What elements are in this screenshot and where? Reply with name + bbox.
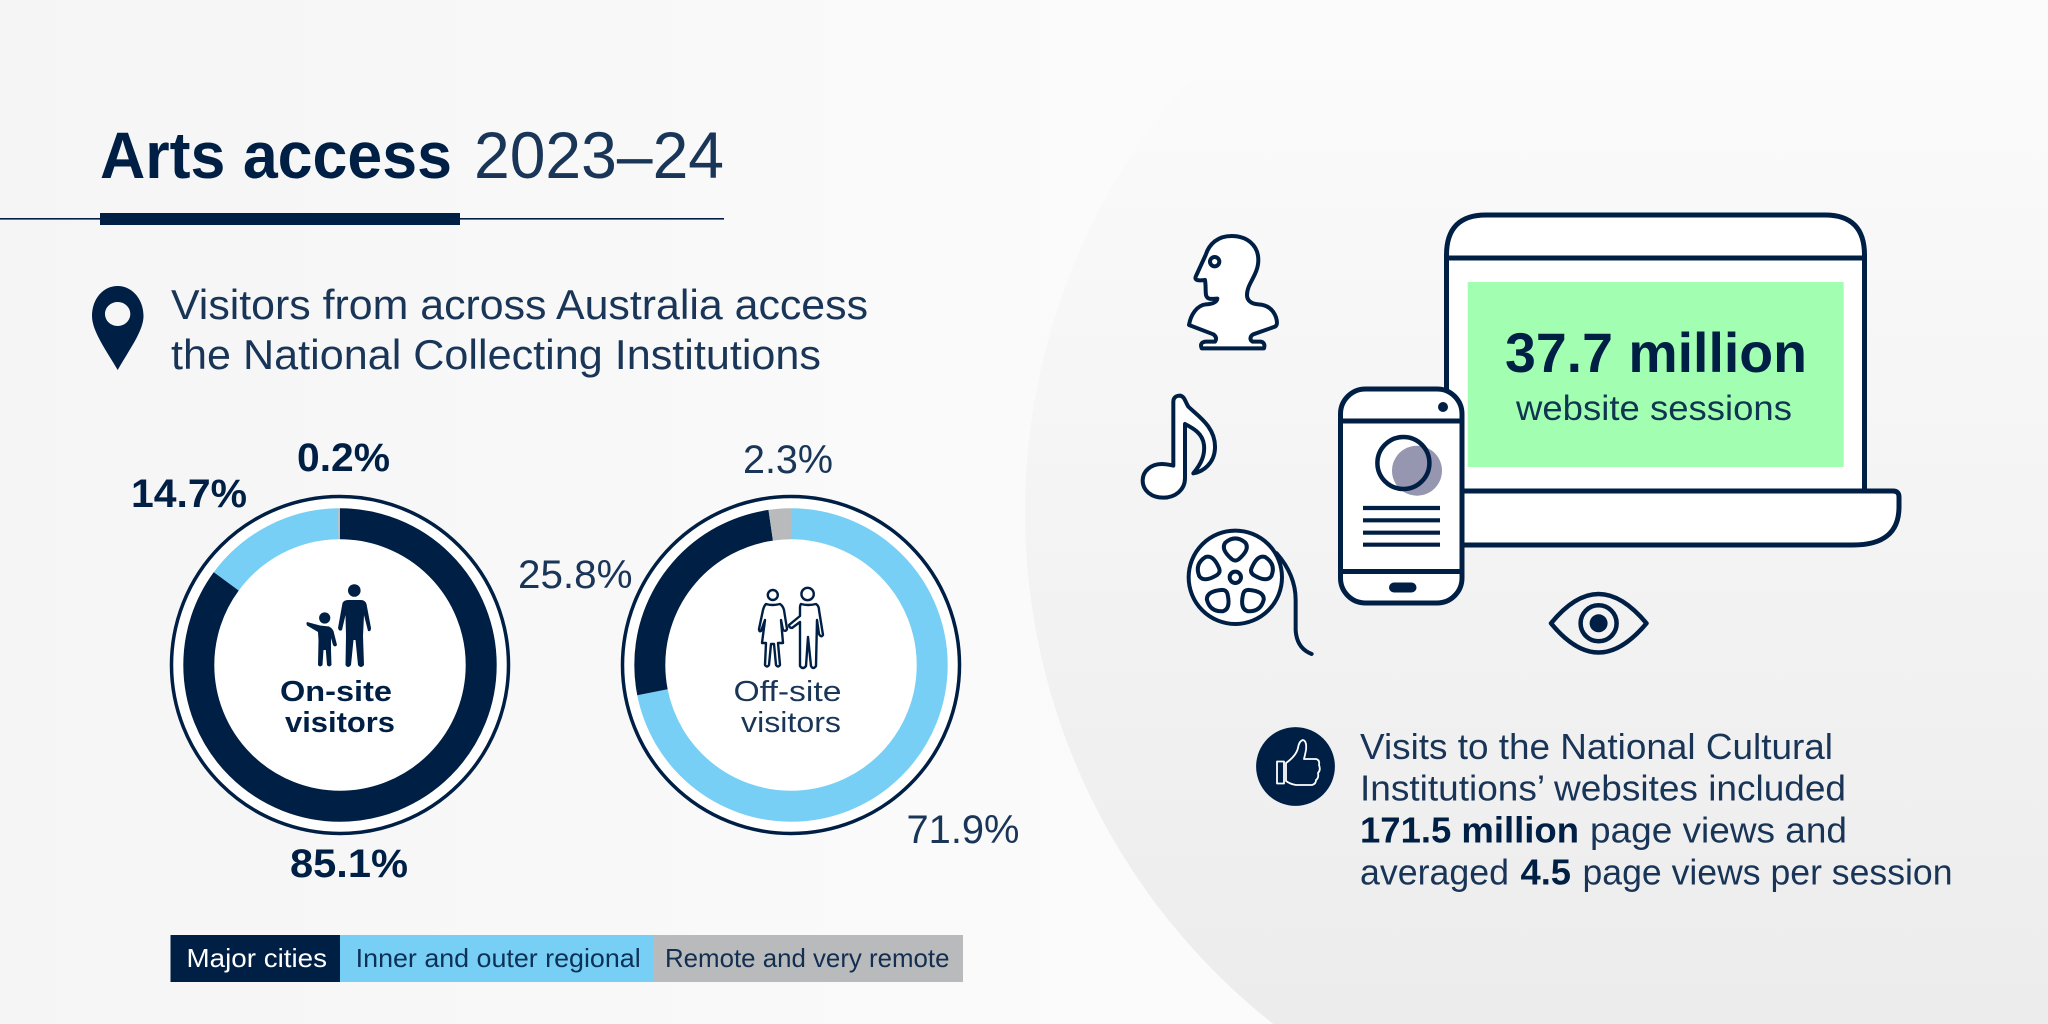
legend: Inner and outer regional (356, 943, 641, 973)
icon: bust sculpture (1189, 236, 1277, 348)
text: page views summary: page views and (1590, 810, 1847, 850)
text: visitors intro: Visitors from across Australia access (171, 281, 868, 328)
icon: eye (1551, 594, 1646, 652)
label: on-site visitors: visitors (285, 707, 395, 739)
label: off-site visitors (734, 676, 842, 739)
text: page views summary: Visits to the National Cultural (1360, 726, 1833, 767)
value: 2.3%: 2.3% (743, 438, 833, 482)
icon: adult and child (306, 584, 371, 667)
panel: website sessions: website sessions (1515, 389, 1792, 428)
icon: phone (1339, 389, 1463, 603)
label: on-site visitors: On-site (280, 676, 392, 708)
panel: website sessions: 37.7 million (1505, 321, 1807, 384)
text: page views summary: 171.5 million (1360, 810, 1579, 850)
value: 71.9%: 71.9% (906, 808, 1020, 852)
text: visitors intro: the National Collecting Institutions (171, 331, 821, 378)
label: off-site visitors: Off-site (734, 676, 842, 708)
legend (170, 935, 963, 982)
text: page views summary: 4.5 (1520, 852, 1571, 892)
label: off-site visitors: visitors (741, 707, 841, 739)
icon: music note (1143, 396, 1215, 498)
legend: Remote and very remote (665, 943, 950, 973)
label: on-site visitors (280, 676, 395, 739)
icon: film reel (1189, 531, 1312, 654)
icon: two outlined people (759, 588, 823, 668)
title: Arts access (100, 118, 452, 192)
title (100, 118, 724, 192)
value: 85.1%: 85.1% (290, 842, 408, 886)
icon: location pin (92, 286, 144, 370)
value: 0.2%: 0.2% (297, 436, 390, 480)
panel: website sessions (1468, 282, 1844, 467)
legend: Major cities (186, 943, 327, 973)
title: 2023–24 (474, 118, 724, 192)
text: page views summary: page views per session (1582, 852, 1952, 892)
icon: laptop (1440, 215, 1899, 545)
text: visitors intro (171, 281, 868, 378)
icon: thumbs up (1256, 727, 1335, 806)
value: 14.7%: 14.7% (131, 472, 247, 516)
value: 25.8%: 25.8% (518, 553, 632, 597)
text: page views summary: Institutions’ websites included (1360, 768, 1846, 808)
chart: off-site visitors donut (622, 496, 960, 834)
text: page views summary (1360, 726, 1952, 892)
chart: on-site visitors donut (172, 496, 508, 834)
text: page views summary: averaged (1360, 852, 1509, 892)
